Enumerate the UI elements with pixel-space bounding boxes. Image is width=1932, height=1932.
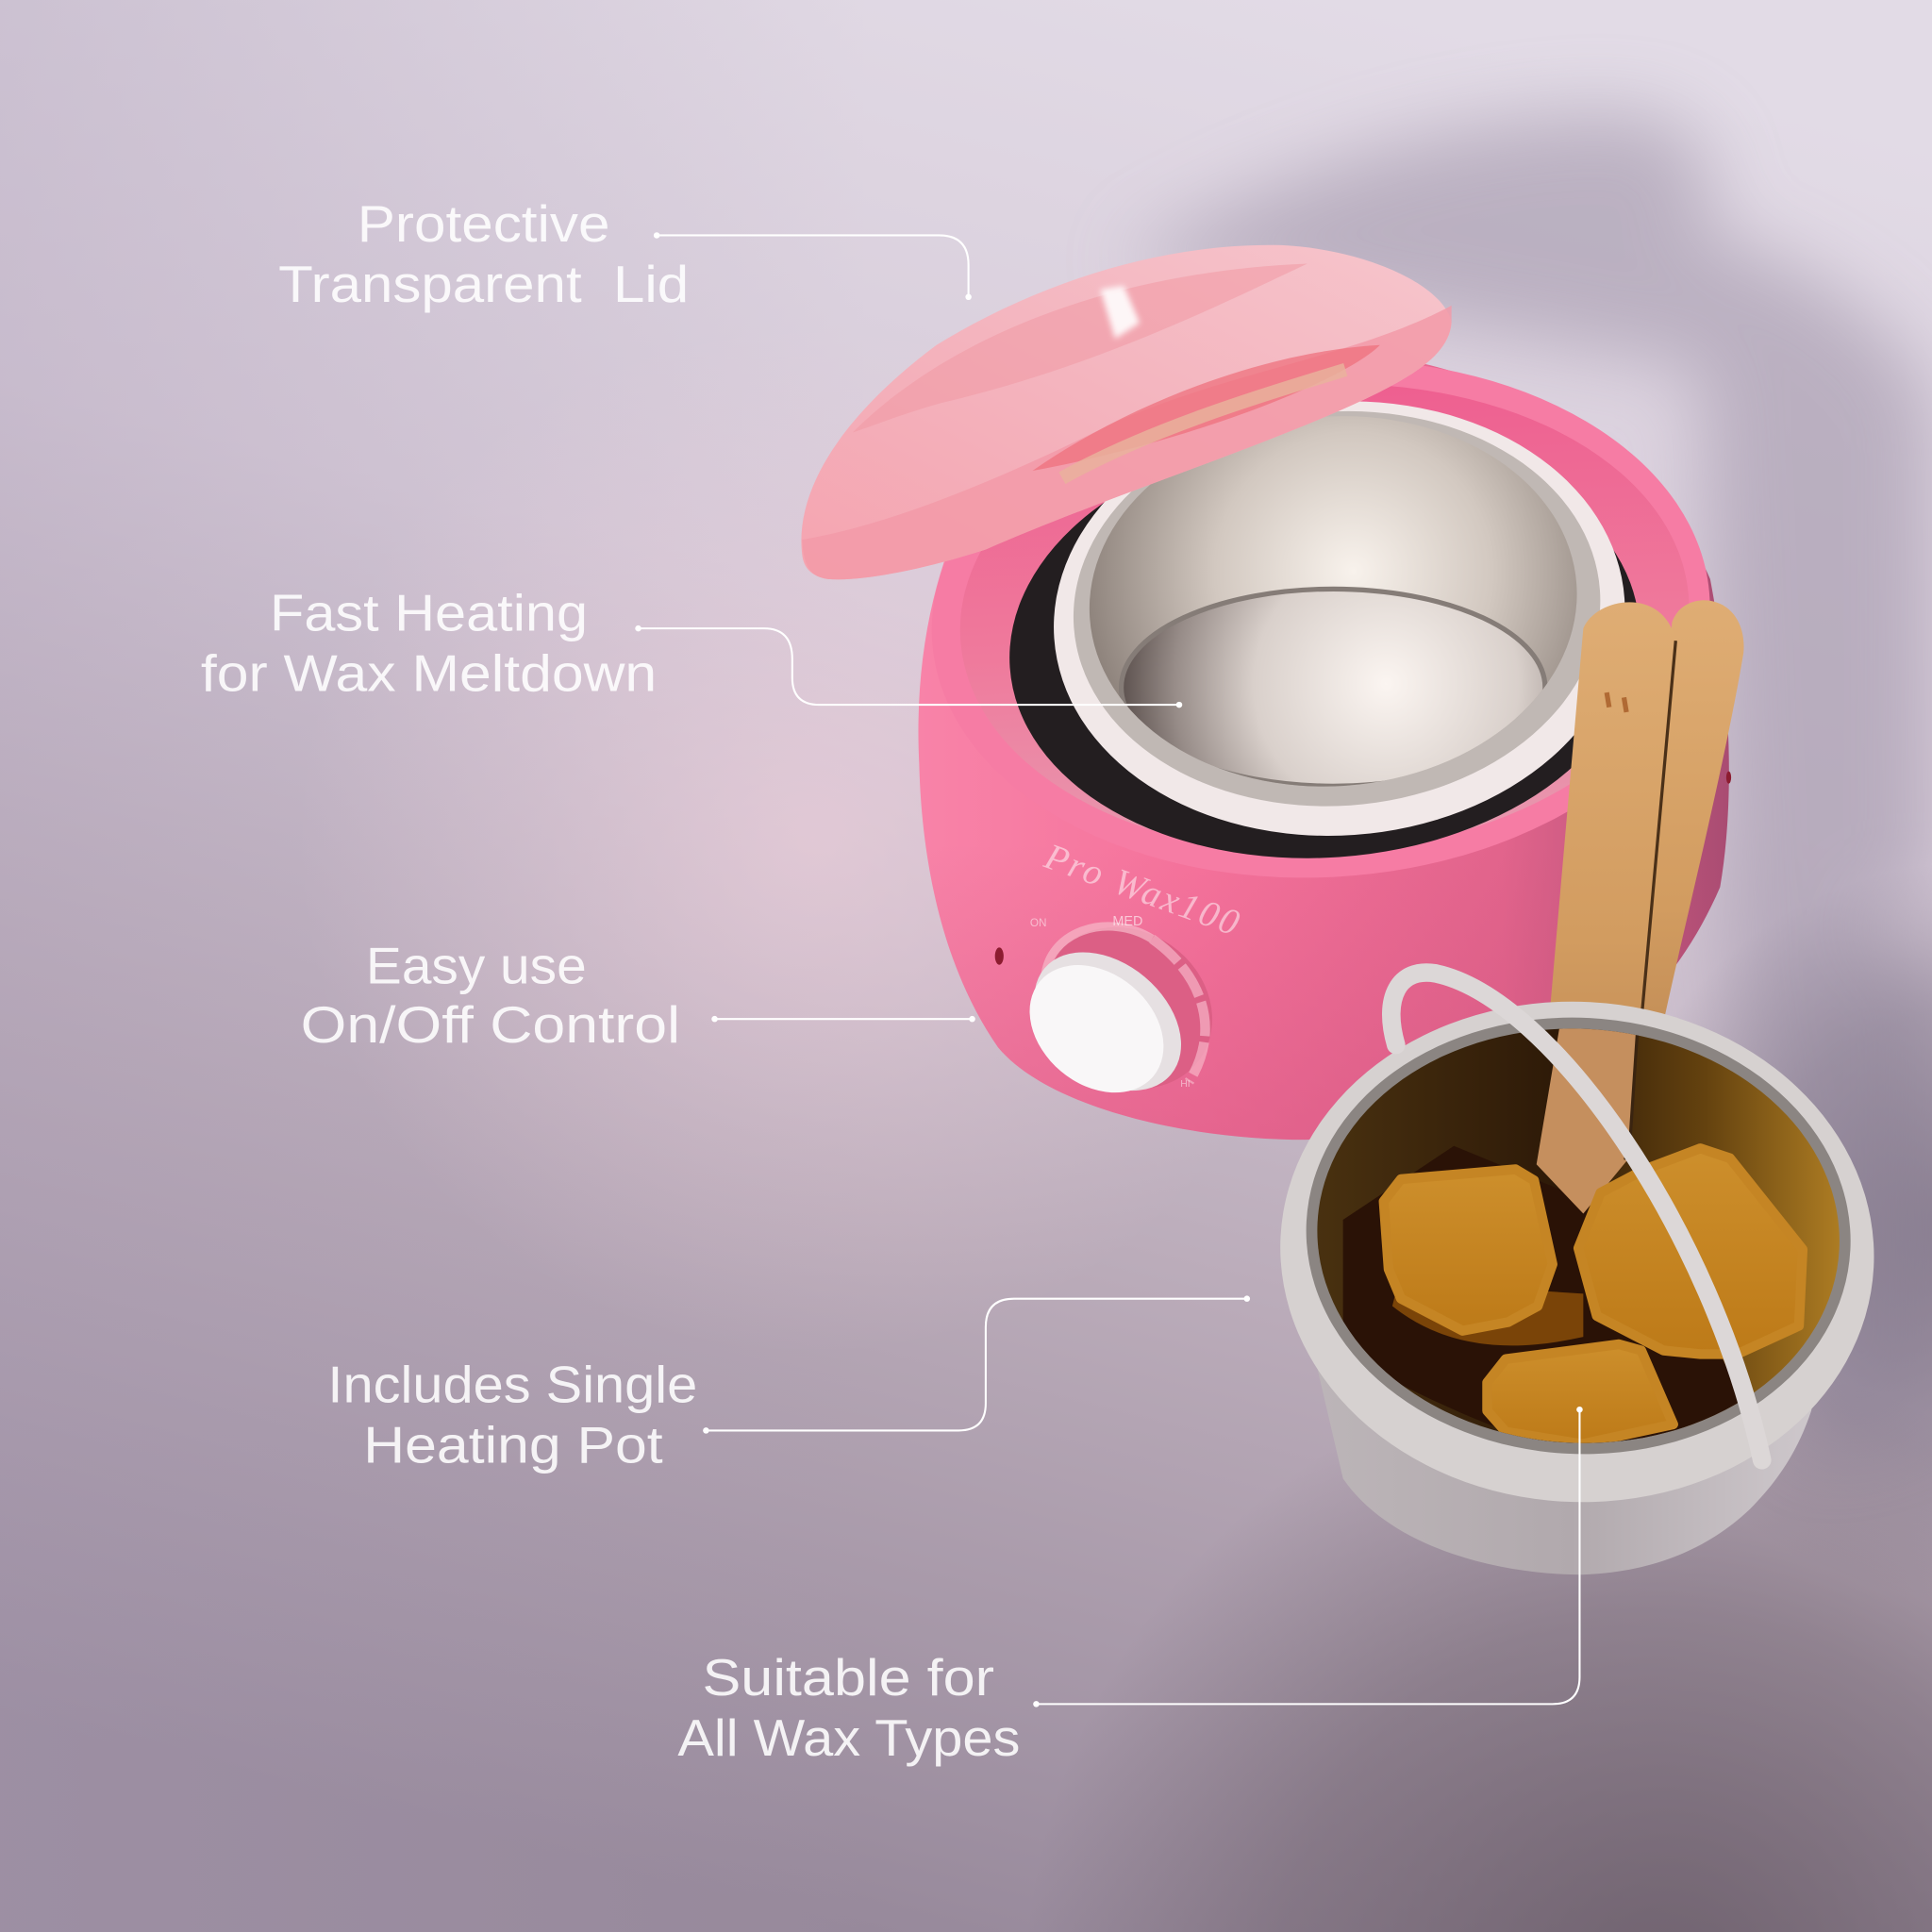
metal pot interior — [1089, 417, 1577, 787]
warmer rim — [919, 340, 1724, 897]
can collar — [1268, 987, 1887, 1517]
callout: protective lid — [278, 194, 972, 313]
lid glass edge — [1062, 370, 1345, 478]
can inner — [1317, 1028, 1840, 1443]
warmer body — [918, 359, 1729, 1140]
spatula marks — [1607, 692, 1626, 712]
temperature scale — [1011, 894, 1244, 1122]
callout: protective lid: Protective — [358, 194, 610, 253]
callout: wax types — [677, 1407, 1583, 1767]
black heating ring — [995, 412, 1654, 879]
lid — [801, 245, 1452, 579]
temperature scale: MED — [1112, 914, 1142, 929]
lid red crescent — [1033, 345, 1380, 471]
wax cube right — [1578, 1148, 1803, 1354]
callout: fast heating — [201, 584, 1182, 708]
can body — [1317, 1343, 1824, 1574]
callout: fast heating: Fast Heating — [270, 584, 588, 642]
melted wax lower — [1392, 1291, 1583, 1345]
callout: heating pot: Heating Pot — [363, 1415, 663, 1474]
callout: fast heating: for Wax Meltdown — [201, 644, 657, 703]
temperature scale: ON — [1030, 917, 1047, 929]
single heating pot — [1268, 973, 1887, 1574]
wooden spatulas — [1537, 600, 1744, 1214]
callout: heating pot — [327, 1295, 1250, 1474]
white collar — [1039, 382, 1640, 855]
wax cube left — [1384, 1170, 1553, 1331]
spatula inside pot — [1536, 1028, 1638, 1213]
second light — [1726, 772, 1731, 784]
callout: protective lid: Transparent Lid — [278, 255, 689, 313]
lid outline — [801, 245, 1452, 579]
callout: wax types: Suitable for — [702, 1648, 994, 1707]
lid highlight — [1100, 286, 1140, 339]
brand text: Pro Wax100 — [1039, 836, 1245, 944]
callout: on/off control: Easy use — [366, 936, 587, 994]
callout: heating pot: Includes Single — [327, 1355, 697, 1413]
knob — [1005, 924, 1208, 1119]
callout: on/off control: On/Off Control — [301, 995, 680, 1054]
wax cube front — [1487, 1344, 1674, 1444]
callout: wax types: All Wax Types — [677, 1708, 1020, 1767]
can inner rim — [1295, 1004, 1861, 1468]
callout: on/off control — [301, 936, 975, 1054]
lid transparent window — [853, 264, 1307, 432]
lid lower band — [802, 306, 1452, 579]
handle — [1391, 973, 1762, 1460]
temperature scale: HI — [1180, 1079, 1191, 1090]
power light — [995, 947, 1004, 965]
wax warmer — [918, 340, 1731, 1140]
